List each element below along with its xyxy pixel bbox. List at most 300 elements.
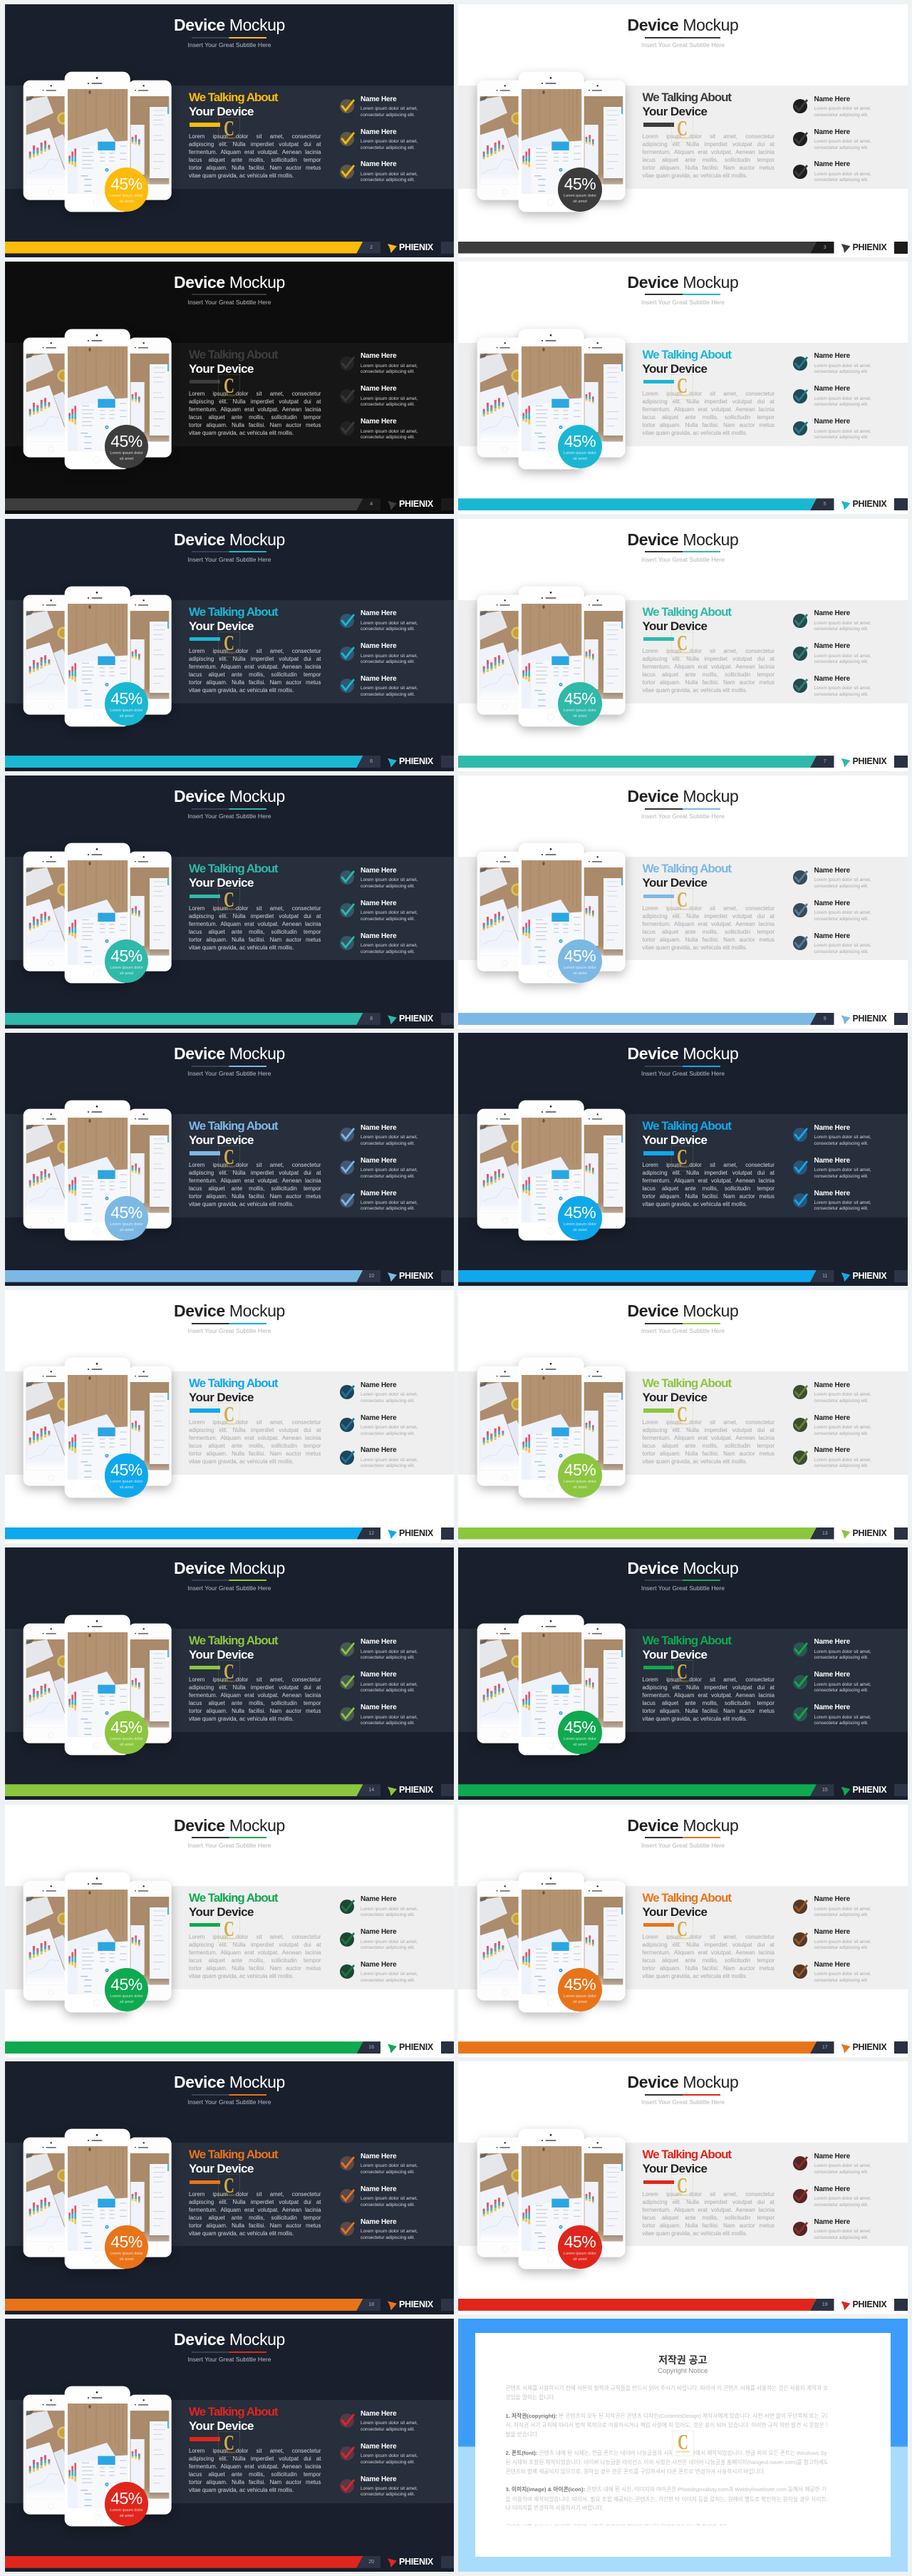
check item 2: consectetur adipiscing elit. xyxy=(814,1431,869,1436)
watermark: COPYRIGHT xyxy=(675,1165,690,1168)
heading xyxy=(643,1891,731,1920)
body text: vitae quam gravida, ac vehicula elit mollis. xyxy=(643,1458,747,1465)
subtitle: Insert Your Great Subtitle Here xyxy=(641,2098,725,2106)
check item 1: Name Here xyxy=(814,867,850,875)
check item 2 xyxy=(339,1927,428,1954)
check item 2: Name Here xyxy=(361,900,396,907)
check item 3: Lorem ipsum dolor sit amet, xyxy=(361,429,418,434)
body text: adipiscing elit. Nulla imperdiet volutpat dui at xyxy=(189,1170,321,1176)
footer xyxy=(458,756,908,768)
check item 3: consectetur adipiscing elit. xyxy=(361,692,415,697)
check item 3: Lorem ipsum dolor sit amet, xyxy=(814,943,871,948)
body text xyxy=(189,2190,321,2237)
check item 2 xyxy=(792,642,881,669)
title rule xyxy=(191,2351,266,2353)
body text: fermentum. Aliquam erat volutpat. Aenean lacinia xyxy=(189,1178,321,1184)
footer: 16 xyxy=(368,2045,374,2050)
percentage badge: 45% xyxy=(110,1718,142,1736)
check item 3: Lorem ipsum dolor sit amet, xyxy=(814,2229,871,2234)
watermark xyxy=(671,632,693,657)
check item 1: Lorem ipsum dolor sit amet, xyxy=(814,2163,871,2168)
body text: fermentum. Aliquam erat volutpat. Aenean lacinia xyxy=(643,664,774,670)
check item 3: Name Here xyxy=(814,1446,850,1454)
body text: tortor aliquam. Nulla facilisi. Nam auctor metus xyxy=(643,165,774,171)
phones mockup xyxy=(23,71,172,214)
check item 1 xyxy=(340,96,418,117)
check item 3: Name Here xyxy=(814,160,850,168)
panel: slide 7 white teal xyxy=(458,519,908,771)
check item 3: consectetur adipiscing elit. xyxy=(814,435,869,440)
check item 1 xyxy=(792,609,881,636)
watermark: C xyxy=(224,115,234,140)
check item 3: consectetur adipiscing elit. xyxy=(814,1463,869,1468)
percentage badge: 45% xyxy=(564,947,596,965)
body text: fermentum. Aliquam erat volutpat. Aenean lacinia xyxy=(189,406,321,413)
percentage badge: Lorem ipsum dolor xyxy=(564,2252,596,2256)
percentage badge: sit amet xyxy=(573,972,587,976)
percentage badge: sit amet xyxy=(573,714,587,718)
check item 2: Lorem ipsum dolor sit amet, xyxy=(361,1682,418,1687)
body text: Lorem ipsum dolor sit amet, consectetur xyxy=(189,1162,321,1168)
watermark: C xyxy=(224,373,234,398)
body text: vitae quam gravida, ac vehicula elit mollis. xyxy=(189,430,294,436)
percentage badge xyxy=(558,1968,602,2011)
check item 1: Name Here xyxy=(814,1124,850,1132)
watermark: COPYRIGHT xyxy=(675,394,690,397)
check item 1: Name Here xyxy=(361,1381,396,1389)
heading: We Talking About xyxy=(643,862,731,875)
heading rule xyxy=(190,2180,220,2184)
check item 2: Lorem ipsum dolor sit amet, xyxy=(361,1168,418,1173)
footer: PHIENIX xyxy=(399,756,433,766)
phones mockup xyxy=(14,1350,185,1507)
heading rule xyxy=(643,637,674,641)
footer: 3 xyxy=(824,245,826,249)
body text: tortor aliquam. Nulla facilisi. Nam auctor metus xyxy=(189,2479,321,2485)
check item 2 xyxy=(339,1155,428,1183)
footer xyxy=(5,1527,454,1540)
watermark: COPYRIGHT xyxy=(222,1423,236,1426)
body text: adipiscing elit. Nulla imperdiet volutpat dui at xyxy=(189,656,321,662)
check item 3: Name Here xyxy=(361,675,396,683)
body text: Lorem ipsum dolor sit amet, consectetur xyxy=(643,1676,774,1683)
title: Device Mockup xyxy=(628,16,738,34)
watermark xyxy=(218,374,239,400)
heading xyxy=(643,1634,731,1662)
subtitle: Insert Your Great Subtitle Here xyxy=(187,2356,271,2363)
percentage badge: 45% xyxy=(564,689,596,708)
percentage badge: 45% xyxy=(110,1460,142,1479)
copyright body text: 콘텐츠와 함께 제공되지 않으므로, 원하실 경우 전문 폰트를 구입하셔서 다른 폰트로 변경하여 사용하시기 바랍니다. xyxy=(506,2468,765,2475)
footer: PHIENIX xyxy=(852,2042,886,2052)
percentage badge xyxy=(105,1453,148,1498)
check item 1: Name Here xyxy=(814,96,850,103)
check item 3: consectetur adipiscing elit. xyxy=(814,2235,869,2240)
footer: PHIENIX xyxy=(852,1271,886,1281)
body text xyxy=(643,1418,774,1465)
percentage badge xyxy=(105,2482,148,2526)
heading xyxy=(189,1891,278,1920)
band xyxy=(458,600,908,704)
check item 1 xyxy=(339,609,428,636)
percentage badge xyxy=(105,939,148,983)
body text: vitae quam gravida, ac vehicula elit mollis. xyxy=(189,944,294,951)
title: Device Mockup xyxy=(628,1302,738,1320)
title: Device Mockup xyxy=(174,530,285,549)
watermark: C xyxy=(224,2173,234,2198)
band xyxy=(4,1371,454,1475)
check item 2 xyxy=(339,2184,428,2211)
check item 2 xyxy=(792,1155,881,1183)
check item 3: Lorem ipsum dolor sit amet, xyxy=(361,2486,418,2491)
body text: adipiscing elit. Nulla imperdiet volutpat dui at xyxy=(189,1942,321,1948)
check item 2 xyxy=(339,1413,428,1440)
check item 3: Name Here xyxy=(361,932,396,940)
percentage badge: Lorem ipsum dolor xyxy=(110,2252,143,2256)
check item 2: Name Here xyxy=(814,642,850,650)
heading: Your Device xyxy=(189,876,254,890)
heading rule xyxy=(190,1151,220,1155)
phones mockup xyxy=(467,579,638,736)
check item 1 xyxy=(339,1380,428,1407)
check item 2: Lorem ipsum dolor sit amet, xyxy=(361,1939,418,1944)
percentage badge xyxy=(105,2225,148,2269)
percentage badge xyxy=(105,682,148,726)
subtitle: Insert Your Great Subtitle Here xyxy=(187,299,271,306)
percentage badge xyxy=(558,1196,602,1240)
heading: We Talking About xyxy=(189,91,278,104)
body text: adipiscing elit. Nulla imperdiet volutpat dui at xyxy=(643,2199,774,2205)
check item 1: Lorem ipsum dolor sit amet, xyxy=(814,877,871,882)
percentage badge: sit amet xyxy=(120,972,133,976)
title rule xyxy=(645,1323,720,1324)
check item 1: Lorem ipsum dolor sit amet, xyxy=(814,1649,871,1654)
footer: PHIENIX xyxy=(399,242,433,252)
heading: Your Device xyxy=(643,876,707,890)
title rule xyxy=(645,2094,720,2096)
check item 2: consectetur adipiscing elit. xyxy=(814,1688,869,1693)
footer: 17 xyxy=(822,2045,828,2050)
heading xyxy=(189,91,278,118)
heading: We Talking About xyxy=(189,2148,278,2161)
phones mockup xyxy=(467,1865,638,2021)
body text: adipiscing elit. Nulla imperdiet volutpat dui at xyxy=(643,1170,774,1176)
check item 3: Lorem ipsum dolor sit amet, xyxy=(814,1458,871,1463)
phones mockup xyxy=(23,329,172,469)
check item 1: consectetur adipiscing elit. xyxy=(814,369,869,374)
check item 1: consectetur adipiscing elit. xyxy=(361,1141,415,1146)
check item 2: Name Here xyxy=(814,1928,850,1936)
body text: vitae quam gravida, ac vehicula elit mollis. xyxy=(643,1716,747,1722)
subtitle: Insert Your Great Subtitle Here xyxy=(641,1585,725,1592)
title: Device Mockup xyxy=(628,1816,738,1835)
body text: fermentum. Aliquam erat volutpat. Aenean lacinia xyxy=(189,1692,321,1699)
check item 1: Lorem ipsum dolor sit amet, xyxy=(361,1135,418,1140)
check item 3: consectetur adipiscing elit. xyxy=(814,1978,869,1983)
copyright body text: 나 이미지를 변경하여 사용하시기 바랍니다. xyxy=(506,2505,604,2511)
percentage badge xyxy=(558,2225,602,2269)
body text: tortor aliquam. Nulla facilisi. Nam auctor metus xyxy=(189,422,321,428)
body text xyxy=(189,133,321,179)
heading rule xyxy=(190,1408,220,1413)
check item 2: Lorem ipsum dolor sit amet, xyxy=(814,139,871,144)
check item 1: Name Here xyxy=(814,2153,850,2160)
check item 1: Lorem ipsum dolor sit amet, xyxy=(814,1135,871,1140)
panel: slide 18 dark orange xyxy=(4,2061,454,2314)
body text: lacus aliquet ante mollis, sollicitudin tempor xyxy=(189,2215,321,2221)
body text xyxy=(189,905,321,952)
title: Device Mockup xyxy=(628,1044,738,1063)
check item 1 xyxy=(792,351,881,378)
check item 1: Lorem ipsum dolor sit amet, xyxy=(361,1392,418,1397)
percentage badge: sit amet xyxy=(573,457,587,461)
check item 1: Lorem ipsum dolor sit amet, xyxy=(814,364,871,369)
title rule xyxy=(191,2094,266,2096)
check item 2: Name Here xyxy=(814,385,850,393)
check item 3: consectetur adipiscing elit. xyxy=(361,435,415,440)
percentage badge: 45% xyxy=(564,2232,596,2251)
check item 3 xyxy=(339,1446,428,1473)
heading rule xyxy=(190,1666,220,1669)
watermark: COPYRIGHT xyxy=(675,908,690,911)
body text: adipiscing elit. Nulla imperdiet volutpat dui at xyxy=(189,1427,321,1433)
check item 1: consectetur adipiscing elit. xyxy=(361,884,415,889)
heading: Your Device xyxy=(189,2419,254,2433)
body text xyxy=(643,905,774,952)
percentage badge xyxy=(558,1711,602,1754)
check item 3: Name Here xyxy=(361,418,396,426)
check item 3: Name Here xyxy=(814,675,850,683)
band xyxy=(4,2400,454,2503)
heading xyxy=(189,1634,278,1662)
watermark xyxy=(218,1403,239,1428)
heading rule xyxy=(643,123,674,127)
check item 2: Lorem ipsum dolor sit amet, xyxy=(814,1939,871,1944)
check item 3: Lorem ipsum dolor sit amet, xyxy=(361,1715,418,1720)
body text: tortor aliquam. Nulla facilisi. Nam auctor metus xyxy=(189,1451,321,1457)
copyright body text: 벌을 받습니다. xyxy=(506,2431,539,2438)
watermark: C xyxy=(677,630,688,655)
heading xyxy=(643,605,731,634)
copyright body text: 것임을 말하는 합니다. xyxy=(506,2394,556,2401)
check item 2: Name Here xyxy=(361,1414,396,1422)
check item 3 xyxy=(339,674,428,701)
watermark xyxy=(218,2174,239,2200)
footer: PHIENIX xyxy=(399,2299,433,2309)
check item 3: Lorem ipsum dolor sit amet, xyxy=(361,2229,418,2234)
check item 2: Lorem ipsum dolor sit amet, xyxy=(361,2453,418,2458)
phones mockup xyxy=(467,2121,638,2278)
heading xyxy=(189,1376,278,1405)
footer xyxy=(5,1270,454,1282)
band xyxy=(4,857,454,960)
body text xyxy=(643,1676,774,1723)
footer: 18 xyxy=(368,2302,374,2307)
watermark: COPYRIGHT xyxy=(675,2451,690,2453)
panel: slide 10 dark light blue xyxy=(4,1033,454,1286)
check item 1: Lorem ipsum dolor sit amet, xyxy=(361,621,418,626)
percentage badge: 45% xyxy=(564,1203,596,1222)
check item 3: consectetur adipiscing elit. xyxy=(814,692,869,697)
watermark: COPYRIGHT xyxy=(222,2194,236,2197)
watermark: C xyxy=(224,1916,234,1941)
check item 2: Name Here xyxy=(814,1414,850,1422)
watermark: COPYRIGHT xyxy=(222,2451,236,2454)
check item 2 xyxy=(792,1927,881,1954)
band xyxy=(458,1629,908,1732)
footer: 4 xyxy=(370,502,373,507)
check item 2 xyxy=(792,2184,881,2211)
title rule xyxy=(645,808,720,810)
check item 3: Name Here xyxy=(814,418,850,426)
heading: We Talking About xyxy=(189,1891,278,1905)
check item 2: consectetur adipiscing elit. xyxy=(361,1945,415,1950)
title rule xyxy=(191,808,266,810)
body text: adipiscing elit. Nulla imperdiet volutpat dui at xyxy=(643,398,774,405)
check item 3 xyxy=(339,2217,428,2244)
check item 1 xyxy=(339,865,428,892)
footer: PHIENIX xyxy=(852,2299,886,2309)
check item 1 xyxy=(339,1123,428,1150)
body text xyxy=(189,1418,321,1465)
title: Device Mockup xyxy=(174,787,285,805)
watermark: COPYRIGHT xyxy=(222,394,236,397)
check item 1: consectetur adipiscing elit. xyxy=(814,2170,869,2175)
footer xyxy=(458,2299,908,2311)
body text: fermentum. Aliquam erat volutpat. Aenean lacinia xyxy=(643,1178,774,1184)
watermark xyxy=(671,117,693,143)
percentage badge: Lorem ipsum dolor xyxy=(110,1994,143,1999)
heading rule xyxy=(190,895,220,898)
percentage badge xyxy=(105,425,148,468)
check item 2: Name Here xyxy=(361,128,396,136)
check item 3: Lorem ipsum dolor sit amet, xyxy=(814,429,871,434)
panel: slide 16 white green xyxy=(4,1805,454,2057)
footer: PHIENIX xyxy=(852,242,886,252)
check item 3: consectetur adipiscing elit. xyxy=(361,1463,415,1468)
body text: lacus aliquet ante mollis, sollicitudin tempor xyxy=(643,2215,774,2221)
watermark xyxy=(671,2174,693,2200)
title rule xyxy=(191,37,266,38)
body text xyxy=(643,1933,774,1980)
body text: lacus aliquet ante mollis, sollicitudin tempor xyxy=(643,671,774,678)
footer: PHIENIX xyxy=(399,499,433,509)
footer xyxy=(458,498,908,510)
footer: PHIENIX xyxy=(852,756,886,766)
watermark xyxy=(671,1403,693,1428)
percentage badge: sit amet xyxy=(573,200,587,204)
title: Device Mockup xyxy=(628,787,738,805)
heading: We Talking About xyxy=(643,1891,731,1905)
percentage badge xyxy=(558,425,602,468)
check item 2: consectetur adipiscing elit. xyxy=(361,1688,415,1693)
body text: lacus aliquet ante mollis, sollicitudin tempor xyxy=(189,1957,321,1964)
check item 1: Name Here xyxy=(814,1381,850,1389)
footer: 20 xyxy=(368,2560,374,2565)
check item 2: consectetur adipiscing elit. xyxy=(814,659,869,664)
phones mockup xyxy=(14,579,185,736)
check item 2: Lorem ipsum dolor sit amet, xyxy=(814,1425,871,1430)
body text: fermentum. Aliquam erat volutpat. Aenean lacinia xyxy=(643,406,774,413)
heading: We Talking About xyxy=(189,1634,278,1647)
body text xyxy=(643,390,774,437)
band xyxy=(4,1886,454,1989)
footer xyxy=(4,2556,454,2568)
percentage badge: sit amet xyxy=(120,457,133,461)
body text: Lorem ipsum dolor sit amet, consectetur xyxy=(189,905,321,912)
phones mockup xyxy=(14,835,185,992)
check item 1: Lorem ipsum dolor sit amet, xyxy=(814,1392,871,1397)
percentage badge: Lorem ipsum dolor xyxy=(110,1222,143,1227)
heading: We Talking About xyxy=(643,2148,731,2161)
body text: vitae quam gravida, ac vehicula elit mollis. xyxy=(189,172,294,179)
body text: adipiscing elit. Nulla imperdiet volutpat dui at xyxy=(189,398,321,405)
body text: tortor aliquam. Nulla facilisi. Nam auctor metus xyxy=(643,1965,774,1972)
check item 3: Lorem ipsum dolor sit amet, xyxy=(814,686,871,691)
body text: tortor aliquam. Nulla facilisi. Nam auctor metus xyxy=(643,937,774,943)
percentage badge: sit amet xyxy=(120,2000,133,2004)
check item 3: consectetur adipiscing elit. xyxy=(361,2492,415,2497)
body text: adipiscing elit. Nulla imperdiet volutpat dui at xyxy=(643,656,774,662)
heading: Your Device xyxy=(189,1133,254,1147)
footer: 14 xyxy=(368,1788,374,1793)
percentage badge: sit amet xyxy=(573,2000,587,2004)
check item 3: consectetur adipiscing elit. xyxy=(361,1721,415,1726)
heading xyxy=(189,348,278,376)
percentage badge xyxy=(558,939,602,983)
phones mockup xyxy=(14,2121,185,2278)
percentage badge: Lorem ipsum dolor xyxy=(110,966,143,970)
phones mockup xyxy=(467,835,638,992)
percentage badge: 45% xyxy=(110,1203,142,1222)
footer: PHIENIX xyxy=(852,1014,886,1024)
heading: We Talking About xyxy=(643,1634,731,1647)
check item 1 xyxy=(340,352,418,374)
heading xyxy=(189,605,278,634)
body text: fermentum. Aliquam erat volutpat. Aenean lacinia xyxy=(189,1435,321,1441)
body text xyxy=(643,2190,774,2237)
percentage badge: Lorem ipsum dolor xyxy=(110,194,143,198)
check item 1: Lorem ipsum dolor sit amet, xyxy=(361,1649,418,1654)
check item 3: consectetur adipiscing elit. xyxy=(361,2235,415,2240)
body text: adipiscing elit. Nulla imperdiet volutpat dui at xyxy=(189,141,321,148)
percentage badge: sit amet xyxy=(120,714,133,718)
percentage badge: sit amet xyxy=(120,2514,133,2518)
panel: slide 6 dark cyan xyxy=(4,519,454,771)
check item 2: consectetur adipiscing elit. xyxy=(814,402,869,407)
body text: Lorem ipsum dolor sit amet, consectetur xyxy=(643,1419,774,1426)
percentage badge: 45% xyxy=(110,2489,142,2508)
percentage badge: 45% xyxy=(110,175,142,193)
check item 1: consectetur adipiscing elit. xyxy=(361,2427,415,2432)
heading: Your Device xyxy=(643,1133,707,1147)
subtitle: Insert Your Great Subtitle Here xyxy=(641,1070,725,1077)
watermark xyxy=(218,2431,239,2457)
watermark: C xyxy=(224,2430,234,2455)
percentage badge: 45% xyxy=(110,432,142,450)
heading: We Talking About xyxy=(643,1376,731,1390)
title rule xyxy=(191,1066,266,1067)
check item 1: Name Here xyxy=(361,609,396,617)
check item 1 xyxy=(792,1637,881,1664)
percentage badge xyxy=(558,168,602,212)
check item 3 xyxy=(339,416,428,443)
check item 2: consectetur adipiscing elit. xyxy=(814,1174,869,1179)
percentage badge: Lorem ipsum dolor xyxy=(564,1222,596,1227)
heading rule xyxy=(190,1923,220,1927)
check item 2 xyxy=(792,898,881,925)
footer: 19 xyxy=(822,2302,828,2307)
